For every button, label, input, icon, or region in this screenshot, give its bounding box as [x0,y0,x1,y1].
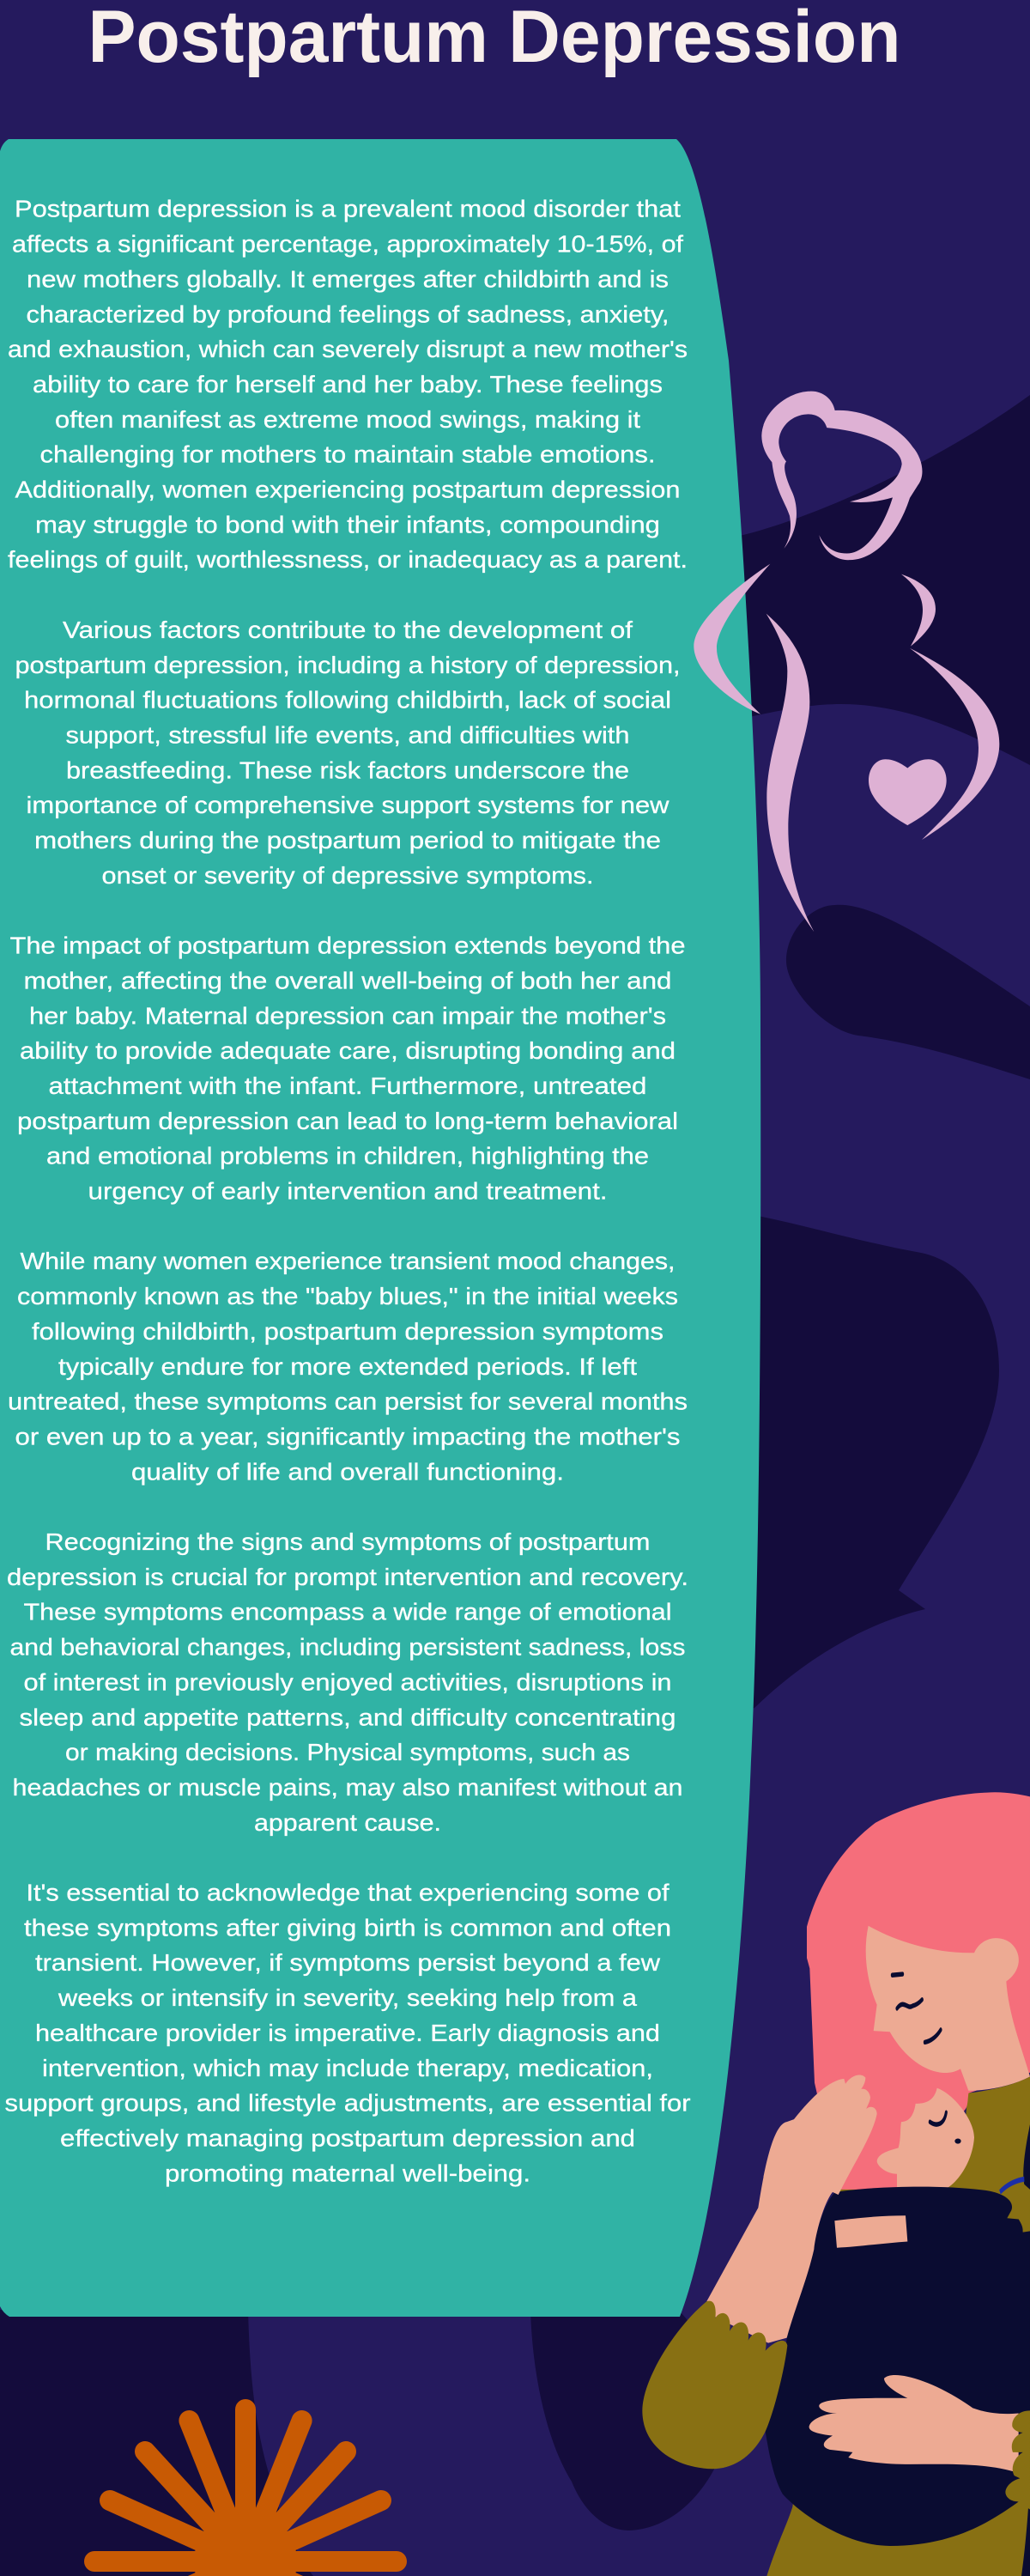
baby facial features [930,2112,961,2144]
text block: paragraph 3: mother, affecting the overall well-being of both her and [24,967,671,994]
blue strap [1000,2179,1024,2192]
text block: paragraph 5: These symptoms encompass a wide range of emotional [24,1599,671,1625]
dark region bottom left [0,2310,313,2576]
hair and face outline [761,392,922,560]
text block: paragraph 5: of interest in previously enjoyed activities, disruptions in [24,1668,671,1695]
text block: paragraph 3: urgency of early intervention and treatment. [88,1178,608,1205]
text block: paragraph 6 [5,1879,690,2186]
text block: paragraph 6: support groups, and lifestyle adjustments, are essential for [5,2090,690,2117]
text block: paragraph 5: apparent cause. [254,1809,441,1836]
text block: paragraph 5: headaches or muscle pains, may also manifest without an [12,1774,683,1801]
baby head [877,2088,974,2188]
text block: paragraph 1: Postpartum depression is a prevalent mood disorder that [15,196,681,222]
text block: paragraph 4: While many women experience transient mood changes, [21,1248,676,1274]
lower cuff [1005,2410,1030,2510]
text block: paragraph 4: typically endure for more extended periods. If left [58,1353,637,1380]
text block: paragraph 5: and behavioral changes, including persistent sadness, loss [10,1634,685,1661]
navy strap edge [1023,2124,1030,2190]
text block: paragraph 1: and exhaustion, which can severely disrupt a new mother's [8,336,688,362]
text block: paragraph 1: often manifest as extreme mood swings, making it [55,406,640,433]
belly curve [910,648,999,840]
text block: paragraph 2: mothers during the postpartum period to mitigate the [34,827,661,854]
text block: paragraph 3 [10,933,685,1205]
text block: paragraph 1: ability to care for herself and her baby. These feelings [33,371,663,398]
mother torso [766,2076,1030,2576]
text block: paragraph 3: ability to provide adequate care, disrupting bonding and [20,1037,676,1064]
text block: paragraph 1: Additionally, women experiencing postpartum depression [15,476,680,503]
text block: paragraph 6: effectively managing postpartum depression and [60,2124,635,2152]
mother face [866,1926,1030,2091]
text block: paragraph 5 [7,1528,688,1836]
sleeve [642,2301,787,2469]
text block: paragraph 5: Recognizing the signs and symptoms of postpartum [45,1528,651,1555]
text block: paragraph 4 [8,1248,688,1485]
text block: paragraph 6: transient. However, if symptoms persist beyond a few [35,1949,660,1976]
text block: paragraph 2: Various factors contribute to the development of [63,617,633,643]
navy lower edge [1021,2507,1030,2576]
text block: paragraph 3: and emotional problems in children, highlighting the [46,1143,649,1170]
text block: paragraph 5: or making decisions. Physical symptoms, such as [65,1739,630,1765]
dark blob bottom centre [530,2310,724,2530]
breast curve [901,574,936,647]
text block: paragraph 3: postpartum depression can lead to long-term behavioral [17,1108,678,1134]
text block: paragraph 1 [8,196,688,573]
text block: paragraph 4: following childbirth, postpartum depression symptoms [32,1318,663,1345]
mother facial features [892,1974,941,2042]
icon: pregnant woman silhouette [694,392,999,932]
text block: paragraph 1: characterized by profound feelings of sadness, anxiety, [26,301,670,327]
navy baby carrier [766,2187,1030,2546]
dark band behind silhouette [721,395,1030,765]
text block: paragraph 1: challenging for mothers to maintain stable emotions. [39,441,656,468]
dark blob middle [738,1212,999,1713]
text block: paragraph 2: support, stressful life events, and difficulties with [65,721,630,749]
text block: paragraph 2: postpartum depression, including a history of depression, [15,652,680,678]
text block: paragraph 1: new mothers globally. It emerges after childbirth and is [27,265,669,292]
carrier skin patch [834,2215,907,2248]
text block: paragraph 1: feelings of guilt, worthlessness, or inadequacy as a parent. [8,546,688,573]
back arm curve [694,564,770,714]
spine curve [766,614,814,932]
text block: paragraph 2 [15,617,680,889]
text block: paragraph 5: depression is crucial for prompt intervention and recovery. [7,1564,688,1590]
text block: paragraph 5: sleep and appetite patterns, and difficulty concentrating [19,1704,676,1730]
text block: paragraph 4: commonly known as the "baby blues," in the initial weeks [17,1283,678,1309]
dark blob upper [786,905,1030,1079]
text block: paragraph 3: her baby. Maternal depression can impair the mother's [29,1002,666,1029]
text block: paragraph 6: It's essential to acknowledge that experiencing some of [26,1879,670,1906]
text block: paragraph 6: promoting maternal well-being. [165,2160,530,2186]
text block: paragraph 4: or even up to a year, significantly impacting the mother's [15,1424,680,1449]
text block: paragraph 4: quality of life and overall functioning. [131,1458,564,1485]
icon: orange sunburst [94,2409,397,2576]
text block: paragraph 6: weeks or intensify in severity, seeking help from a [58,1984,638,2011]
mother hair [807,1792,1030,2190]
text block: paragraph 4: untreated, these symptoms can persist for several months [8,1388,688,1415]
illustration: mother holding baby [642,1792,1030,2576]
lower arm and hand [809,2375,1019,2473]
text block: paragraph 2: onset or severity of depressive symptoms. [101,862,594,889]
text block: paragraph 2: importance of comprehensive support systems for new [26,792,670,818]
text block: paragraph 6: healthcare provider is imperative. Early diagnosis and [35,2020,660,2046]
text block: paragraph 3: attachment with the infant. Furthermore, untreated [48,1072,646,1099]
panel: teal text panel [0,139,760,2317]
raised arm and hand [706,2075,877,2343]
text block: paragraph 2: breastfeeding. These risk factors underscore the [66,756,629,783]
text block: paragraph 1: may struggle to bond with their infants, compounding [35,511,660,538]
text block: paragraph 6: intervention, which may include therapy, medication, [42,2055,653,2081]
icon: heart [869,759,947,825]
text block: paragraph 3: The impact of postpartum depression extends beyond the [10,933,685,959]
text block: paragraph 1: affects a significant percentage, approximately 10-15%, of [12,231,683,258]
text block: paragraph 6: these symptoms after giving birth is common and often [24,1914,671,1941]
text block: paragraph 2: hormonal fluctuations following childbirth, lack of social [24,687,671,714]
